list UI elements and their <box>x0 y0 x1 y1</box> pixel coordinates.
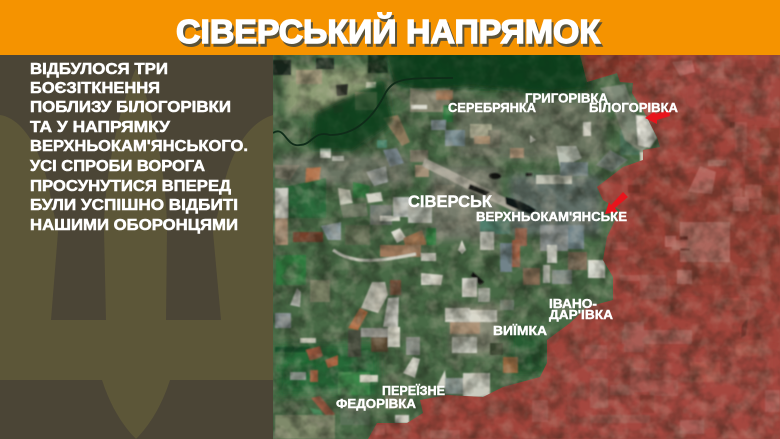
farm fields <box>273 55 657 439</box>
left panel with trident emblem <box>0 55 273 439</box>
map label: Ivano-Darivka: ДАР'ІВКА <box>549 308 613 322</box>
map label: Siversk: СІВЕРСЬК <box>408 193 493 211</box>
body text: БОЄЗІТКНЕННЯ <box>30 80 160 97</box>
map label: Fedorivka: ФЕДОРІВКА <box>336 397 416 411</box>
map label: Verkhnokamianske: ВЕРХНЬОКАМ'ЯНСЬКЕ <box>476 210 627 224</box>
title: СІВЕРСЬКИЙ НАПРЯМОК <box>176 12 601 50</box>
arrow: Verkhnokamianske attack <box>605 192 628 214</box>
map label: Vyimka: ВИЇМКА <box>493 323 547 338</box>
red zone colour correction <box>374 55 780 439</box>
body text: УСІ СПРОБИ ВОРОГА <box>30 158 205 175</box>
body text: ВІДБУЛОСЯ ТРИ <box>30 61 168 78</box>
body text: ВЕРХНЬОКАМ'ЯНСЬКОГО. <box>30 138 248 155</box>
arrow: Bilohorivka attack <box>645 110 670 124</box>
body text: ТА У НАПРЯМКУ <box>30 119 171 136</box>
Bilohorivka pale quarries <box>600 84 647 152</box>
satellite map <box>273 50 780 439</box>
photo texture noise <box>273 55 780 439</box>
title: СІВЕРСЬКИЙ НАПРЯМОК <box>178 15 603 53</box>
map label: Ivano-Darivka <box>549 297 613 322</box>
dark forest and river <box>273 52 588 150</box>
map label: Serebrianka: СЕРЕБРЯНКА <box>448 101 536 115</box>
centre north <box>470 124 492 138</box>
map labels <box>336 92 678 411</box>
map label: Ivano-Darivka: ІВАНО- <box>549 297 597 311</box>
body text: БУЛИ УСПІШНО ВІДБИТІ <box>30 197 238 214</box>
body text: ПРОСУНУТИСЯ ВПЕРЕД <box>30 178 232 195</box>
map label: Bilohorivka: БІЛОГОРІВКА <box>589 101 678 115</box>
occupied territory red overlay <box>368 55 780 439</box>
trident emblem <box>0 68 273 439</box>
body text: ПОБЛИЗУ БІЛОГОРІВКИ <box>30 99 231 116</box>
northwest <box>273 60 291 75</box>
header banner <box>0 0 780 55</box>
map label: Pereizne: ПЕРЕЇЗНЕ <box>382 383 445 398</box>
southwest <box>380 245 421 257</box>
west middle <box>304 166 322 184</box>
body text <box>30 61 248 234</box>
terrain colour washes <box>278 50 605 395</box>
body text: НАШИМИ ОБОРОНЦЯМИ <box>30 217 238 234</box>
centre south <box>422 158 520 212</box>
map label: Hryhorivka: ГРИГОРІВКА <box>525 92 608 106</box>
